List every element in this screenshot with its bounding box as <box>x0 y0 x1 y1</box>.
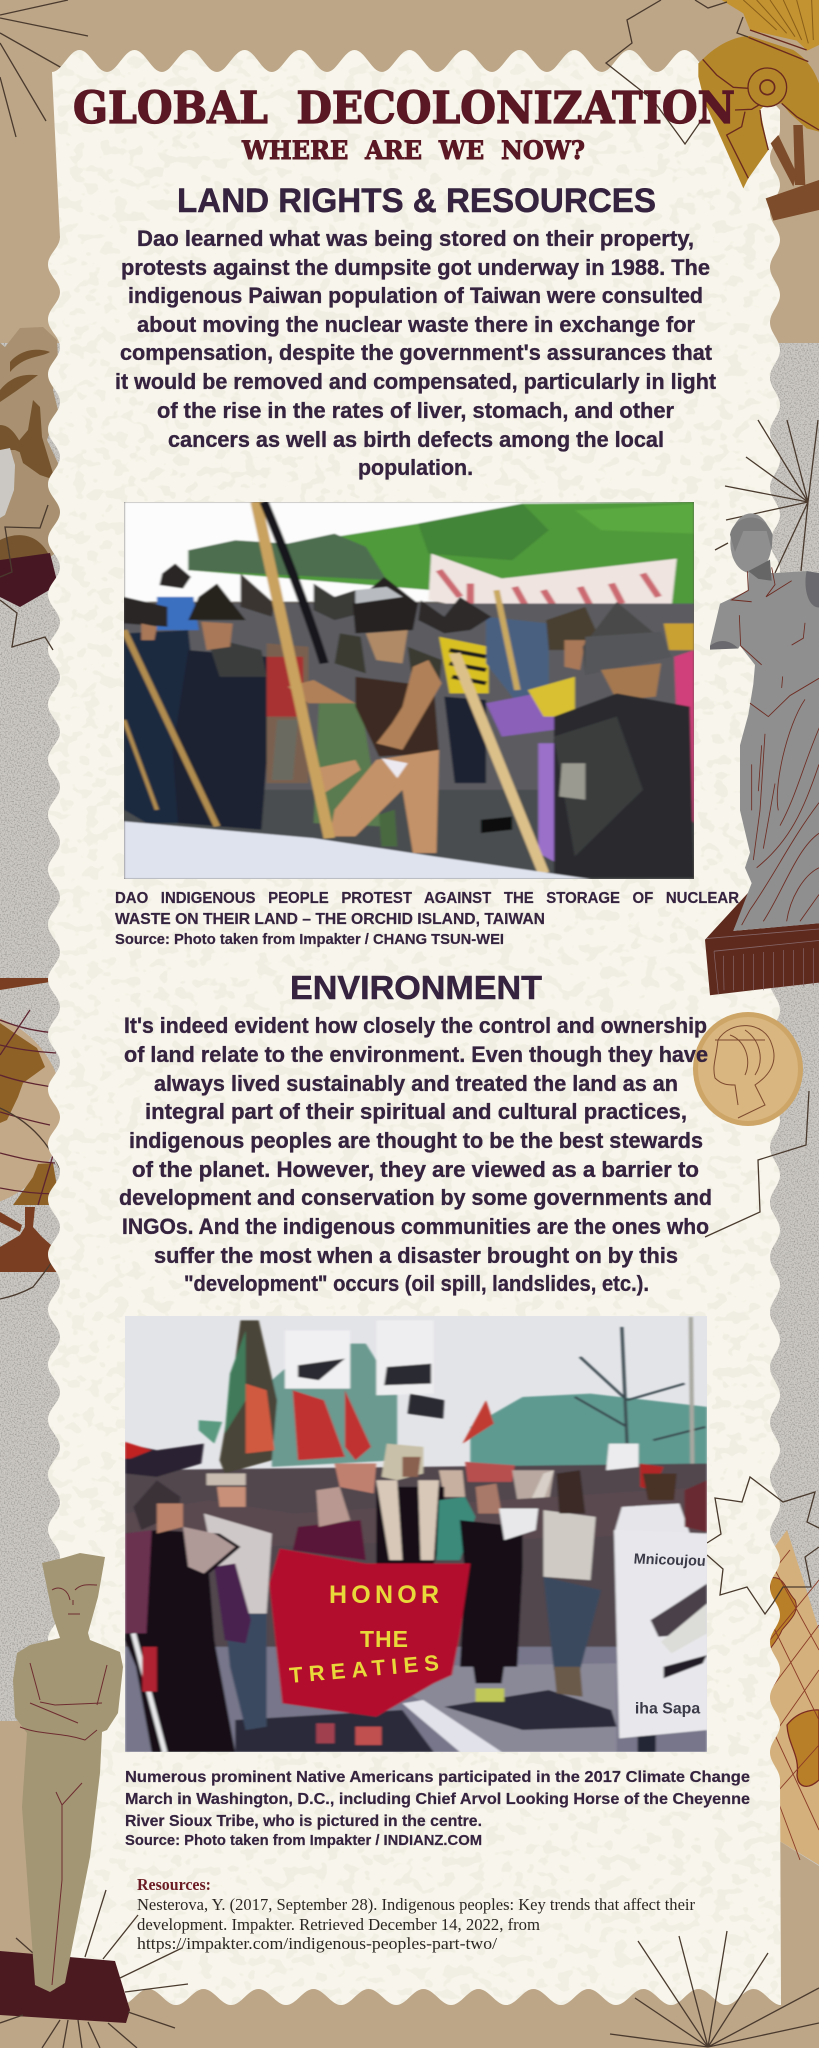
text block: environment body: of land relate to the environment. Even though they have <box>124 1042 708 1067</box>
heading: land rights: LAND RIGHTS & RESOURCES <box>177 182 656 220</box>
photo banner lettering: HONOR <box>329 1581 439 1609</box>
caption: climate march photo: March in Washington, D.C., including Chief Arvol Looking Horse of the Cheyenne <box>125 1791 750 1808</box>
text block: land rights body: population. <box>358 455 473 480</box>
photo: climate march with treaties banner <box>125 1316 707 1752</box>
text block: land rights body: Dao learned what was being stored on their property, <box>137 226 694 251</box>
caption: Dao protest photo: DAO INDIGENOUS PEOPLE PROTEST AGAINST THE STORAGE OF NUCLEAR <box>115 890 739 907</box>
text block: environment body: It's indeed evident how closely the control and ownership <box>124 1013 707 1038</box>
caption: Dao protest photo <box>115 890 739 948</box>
icon: helmet top right <box>698 0 819 221</box>
text block: land rights body: of the rise in the rates of liver, stomach, and other <box>157 398 674 423</box>
text block: resources <box>137 1875 695 1953</box>
icon: medallion coin <box>693 1012 803 1126</box>
text block: environment body: of the planet. However, they are viewed as a barrier to <box>132 1157 699 1182</box>
text block: land rights body: compensation, despite the government's assurances that <box>120 340 713 365</box>
text block: environment body: "development" occurs (oil spill, landslides, etc.). <box>184 1271 649 1296</box>
text block: land rights body <box>115 226 717 480</box>
photo banner lettering: TREATIES <box>288 1650 440 1688</box>
text block: environment body: always lived sustainably and treated the land as an <box>154 1071 678 1096</box>
icon: outline star left <box>0 505 53 650</box>
icon: globe on stand left <box>0 978 72 1299</box>
caption: Dao protest photo: Source: Photo taken from Impakter / CHANG TSUN-WEI <box>115 931 504 948</box>
icon: carved wooden statue left <box>0 1553 188 2048</box>
text block: environment body: development and conservation by some governments and <box>119 1185 712 1210</box>
caption: climate march photo <box>125 1769 750 1849</box>
text block: environment body <box>119 1013 712 1296</box>
text block: environment body: suffer the most when a disaster brought on by this <box>154 1243 678 1268</box>
text block: resources: Nesterova, Y. (2017, September 28). Indigenous peoples: Key trends that affect their <box>137 1895 695 1914</box>
caption: climate march photo: Source: Photo taken from Impakter / INDIANZ.COM <box>125 1832 482 1849</box>
sign lettering in the photo <box>633 1551 706 1717</box>
text block: resources: https://impakter.com/indigenous-peoples-part-two/ <box>137 1934 497 1953</box>
text block: environment body: INGOs. And the indigenous communities are the ones who <box>122 1214 709 1239</box>
icon: venus statue right <box>705 513 819 995</box>
text block: land rights body: it would be removed and compensated, particularly in light <box>115 369 717 394</box>
photo: Dao indigenous protest <box>124 502 694 879</box>
photo banner lettering <box>288 1581 440 1688</box>
icon: sunburst bottom right <box>610 1931 819 2047</box>
icon: bust head left <box>0 327 63 607</box>
text block: resources: development. Impakter. Retrieved December 14, 2022, from <box>137 1915 540 1934</box>
text block: resources: Resources: <box>137 1875 211 1894</box>
text block: environment body: integral part of their spiritual and cultural practices, <box>145 1099 687 1124</box>
icon: outline star top right <box>606 0 748 144</box>
icon: wavy line right <box>705 1091 809 1237</box>
icon: sunburst right <box>715 420 818 573</box>
heading: environment: ENVIRONMENT <box>290 969 542 1006</box>
subtitle: WHERE ARE WE NOW? <box>241 136 585 165</box>
caption: Dao protest photo: WASTE ON THEIR LAND – THE ORCHID ISLAND, TAIWAN <box>115 911 545 928</box>
text block: environment body: indigenous peoples are thought to be the best stewards <box>129 1128 703 1153</box>
icon: outline star lower right <box>707 1477 819 1614</box>
icon: sunburst top left <box>0 0 88 137</box>
text block: land rights body: indigenous Paiwan population of Taiwan were consulted <box>128 283 703 308</box>
icon: map cone lower right <box>765 1530 819 1865</box>
caption: climate march photo: River Sioux Tribe, who is pictured in the centre. <box>125 1813 482 1830</box>
text block: land rights body: protests against the dumpsite got underway in 1988. The <box>121 255 710 280</box>
text block: land rights body: cancers as well as birth defects among the local <box>168 427 664 452</box>
photo banner lettering: THE <box>360 1626 408 1652</box>
title: GLOBAL DECOLONIZATION <box>73 83 735 134</box>
text block: land rights body: about moving the nuclear waste there in exchange for <box>137 312 695 337</box>
caption: climate march photo: Numerous prominent Native Americans participated in the 2017 Climate Change <box>125 1769 750 1786</box>
